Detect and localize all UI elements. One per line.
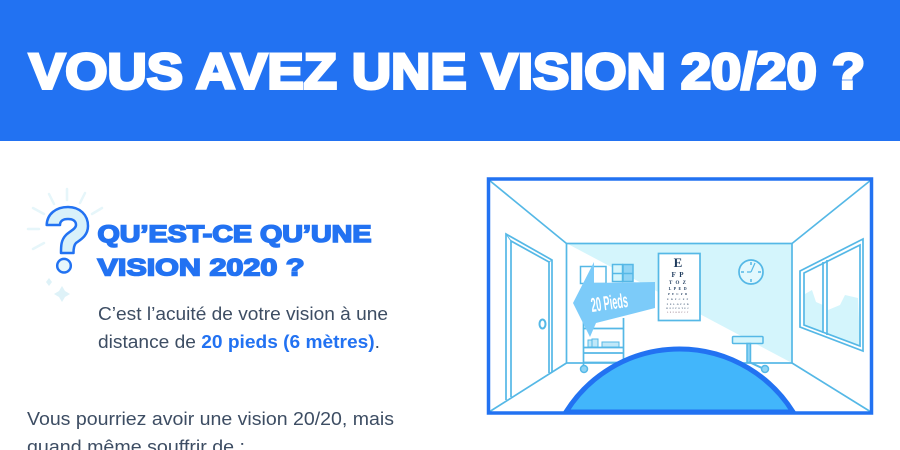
eye chart: L P E D	[669, 286, 687, 291]
heading: what is 20/20 vision: QU’EST-CE QU’UNE	[98, 221, 372, 248]
eye chart: D E F P O T E C	[666, 308, 690, 310]
eye chart: T O Z	[669, 281, 687, 286]
icon: question mark	[28, 189, 102, 302]
door	[506, 234, 552, 400]
text block: intro to symptoms	[27, 409, 394, 450]
text block: definition: distance de 20 pieds (6 mètres) .	[98, 332, 380, 352]
text block: definition	[98, 304, 388, 352]
text block: intro to symptoms: Vous pourriez avoir une vision 20/20, mais	[27, 409, 394, 429]
arrow: 20 pieds: 20 Pieds	[590, 290, 629, 317]
clock	[739, 260, 763, 284]
eye chart: P E C F D	[668, 292, 688, 296]
illustration: exam room	[488, 179, 872, 413]
cart	[580, 318, 624, 372]
text block: definition: C’est l’acuité de votre vision à une	[98, 304, 388, 324]
window	[800, 239, 863, 351]
room frame	[488, 179, 872, 413]
stool	[732, 336, 768, 372]
light beam on back wall	[566, 243, 792, 363]
heading: what is 20/20 vision	[98, 221, 372, 282]
eye chart: E	[674, 255, 682, 270]
eye chart: L E F O D P C T	[667, 312, 689, 314]
title: VOUS AVEZ UNE VISION 20/20 ?	[29, 44, 865, 100]
room perspective lines	[489, 180, 871, 412]
wall cabinets	[580, 264, 633, 284]
eye chart	[658, 254, 700, 320]
eye chart: F E L O P Z D	[667, 304, 689, 306]
eye chart: E D F C Z P	[667, 298, 689, 301]
arrow: 20 pieds	[573, 262, 655, 337]
heading: what is 20/20 vision: VISION 2020 ?	[98, 254, 304, 282]
eye chart: F P	[671, 271, 685, 279]
observer head	[566, 349, 793, 412]
